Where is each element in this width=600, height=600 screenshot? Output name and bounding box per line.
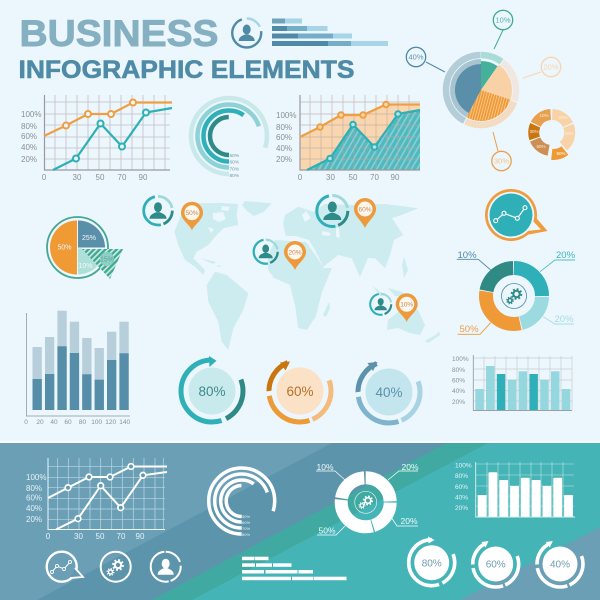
world map (174, 201, 440, 350)
white concentric arcs: 80% (242, 532, 250, 537)
area chart: 90 (391, 173, 400, 182)
label: white 50%: 50% (318, 526, 336, 536)
callout: 20% (523, 57, 561, 78)
icon: map pin 60%: 60% (358, 206, 372, 213)
orange segmented donut: 20% (564, 131, 574, 136)
concentric arc chart: 50% (230, 153, 240, 159)
progress ring 40%: 40% (375, 385, 403, 400)
map: North America (174, 203, 238, 275)
white line chart (26, 458, 167, 541)
donut chart with gears (457, 250, 576, 335)
icon: map pin 50%: 50% (185, 210, 199, 217)
white stacked bars (242, 557, 346, 580)
line chart: orange and teal: 40% (21, 143, 37, 152)
white column chart: 80% (455, 473, 468, 480)
area chart: 20% (276, 155, 292, 164)
callout: 40%: 40% (408, 53, 424, 62)
area chart: 80% (276, 123, 292, 132)
callout: 20%: 20% (543, 63, 559, 72)
area chart: 70 (370, 173, 379, 182)
white progress ring 80% (409, 536, 455, 586)
orange segmented donut: 10% (539, 113, 549, 118)
line chart: orange and teal: 20% (21, 155, 37, 164)
area chart: 60% (276, 133, 292, 142)
icon: map pin 60% (354, 198, 376, 228)
white line chart: 20% (26, 515, 42, 524)
white progress ring 80%: 80% (422, 558, 442, 570)
pie chart with callouts (406, 10, 561, 171)
white line chart: 80% (26, 484, 42, 493)
concentric arc chart: 60% (230, 160, 240, 166)
icon: map user 2 (254, 240, 278, 264)
label: white 10%: 10% (316, 462, 334, 472)
concentric arc chart: 80% (230, 173, 240, 179)
white column chart: 20% (455, 505, 468, 512)
white concentric arcs: 50% (242, 514, 250, 519)
orange segmented donut (529, 113, 574, 156)
label: white 20% lower: 20% (400, 516, 418, 526)
line chart: orange and teal: 80% (21, 122, 37, 131)
progress ring 60%: 60% (286, 384, 314, 399)
label: white 20% top: 20% (402, 462, 419, 472)
line chart: orange and teal: 30 (73, 173, 82, 182)
icon: map pin 20%: 20% (288, 249, 302, 256)
icon: speech bubble with line (485, 189, 548, 241)
pie chart left: 10% (78, 263, 93, 270)
label: 50%: 50% (460, 324, 479, 335)
line chart: orange and teal: 50 (96, 173, 105, 182)
white column chart: 60% (455, 484, 468, 491)
map: inland seas and bays (208, 206, 340, 238)
progress ring 40% (358, 361, 420, 423)
line chart: orange and teal: 70 (118, 173, 127, 182)
area chart: 50 (349, 173, 358, 182)
map: Africa (268, 240, 332, 330)
icon: gears (502, 284, 526, 308)
stacked bar chart: 20 (36, 419, 44, 426)
white line chart: 50 (96, 532, 105, 541)
label: 20% top: 20% (556, 250, 576, 261)
orange segmented donut: 20% (558, 115, 568, 120)
line chart: orange and teal: 60% (21, 132, 37, 141)
white line chart: 0 (46, 532, 51, 541)
area chart: 100% (276, 111, 296, 120)
column chart: 100% (452, 356, 469, 363)
map: South America (207, 272, 248, 350)
stacked bar chart: 120 (105, 419, 117, 426)
icon: map user 4 (370, 294, 391, 315)
title: Business: BUSINESS (20, 13, 218, 54)
stacked bar chart: 60 (64, 419, 72, 426)
white column chart (455, 462, 575, 517)
callout: 40% (406, 47, 445, 72)
white progress ring 40%: 40% (550, 560, 570, 570)
bottom band background (0, 441, 600, 600)
progress ring 80% (181, 356, 243, 422)
stacked bar chart (24, 311, 131, 426)
line chart: orange and teal (21, 95, 172, 182)
column chart: 80% (452, 367, 465, 374)
icon: map pin 10% (396, 293, 418, 322)
map: islands (200, 257, 440, 343)
concentric arc chart: 70% (230, 166, 240, 172)
white progress ring 60% (473, 541, 519, 587)
pie chart left: 50% (57, 244, 72, 252)
white line chart: 40% (26, 504, 42, 513)
white donut chart (316, 462, 419, 536)
stacked bar chart: 80 (79, 419, 86, 426)
stacked bar chart: 0 (24, 419, 28, 426)
white line chart: 60% (26, 494, 42, 502)
icon: white gears (101, 552, 131, 582)
map: Australia (387, 305, 425, 335)
area chart: 0 (298, 173, 303, 182)
pie chart left (47, 217, 123, 279)
callout: 10% (493, 10, 513, 49)
concentric arc chart (191, 98, 267, 179)
stacked bar chart: 100 (91, 419, 103, 426)
white line chart: 70 (117, 532, 126, 541)
stacked bar chart: 40 (50, 419, 58, 426)
callout: 10%: 10% (495, 16, 511, 25)
stacked bar chart: 140 (119, 419, 131, 426)
column chart: 60% (452, 378, 465, 384)
white progress ring 60%: 60% (486, 560, 506, 570)
progress ring 60% (269, 360, 331, 422)
map: Eurasia (283, 204, 418, 277)
icon: map user 3 (317, 196, 348, 226)
white concentric arcs: 60% (242, 520, 250, 525)
icon: map pin 10%: 10% (400, 302, 413, 309)
icon: map pin 50% (181, 202, 203, 230)
line chart: orange and teal: 90 (139, 173, 148, 182)
icon: header user ring (232, 18, 261, 48)
map: Greenland (242, 201, 272, 216)
icon: map user 1 (144, 196, 172, 225)
white concentric arcs (209, 468, 275, 537)
title: Infographic Elements: INFOGRAPHIC ELEMENTS (18, 56, 354, 84)
column chart (452, 355, 572, 410)
header stacked bars (272, 18, 388, 46)
white column chart: 100% (455, 462, 472, 470)
line chart: orange and teal: 0 (42, 173, 47, 182)
callout: 30%: 30% (494, 157, 509, 166)
icon: white donut gears (355, 491, 377, 513)
line chart: orange and teal: 100% (21, 110, 41, 119)
white progress ring 40% (537, 541, 583, 587)
icon: map pin 20% (284, 241, 306, 270)
callout: 30% (492, 132, 511, 171)
column chart: 20% (452, 399, 465, 406)
pie chart left: 15% (100, 256, 114, 264)
white concentric arcs: 70% (242, 526, 250, 531)
orange segmented donut: 30% (529, 129, 539, 134)
column chart: 40% (452, 388, 465, 395)
icon: white user ring (151, 552, 181, 582)
icon: white speech bubble (47, 552, 83, 582)
area chart: 40% (276, 144, 292, 153)
progress ring 80%: 80% (198, 384, 226, 399)
area chart (276, 95, 420, 182)
orange segmented donut: 50% (536, 144, 546, 149)
orange segmented donut: 50% (556, 151, 566, 156)
area chart: 30 (326, 173, 335, 182)
white line chart: 100% (26, 473, 46, 482)
white line chart: 90 (136, 532, 145, 541)
label: 20% lower: 20% (554, 314, 574, 325)
white column chart: 40% (455, 494, 468, 502)
white line chart: 30 (74, 532, 83, 541)
pie chart left: 25% (82, 235, 96, 242)
label: 10%: 10% (458, 250, 477, 261)
